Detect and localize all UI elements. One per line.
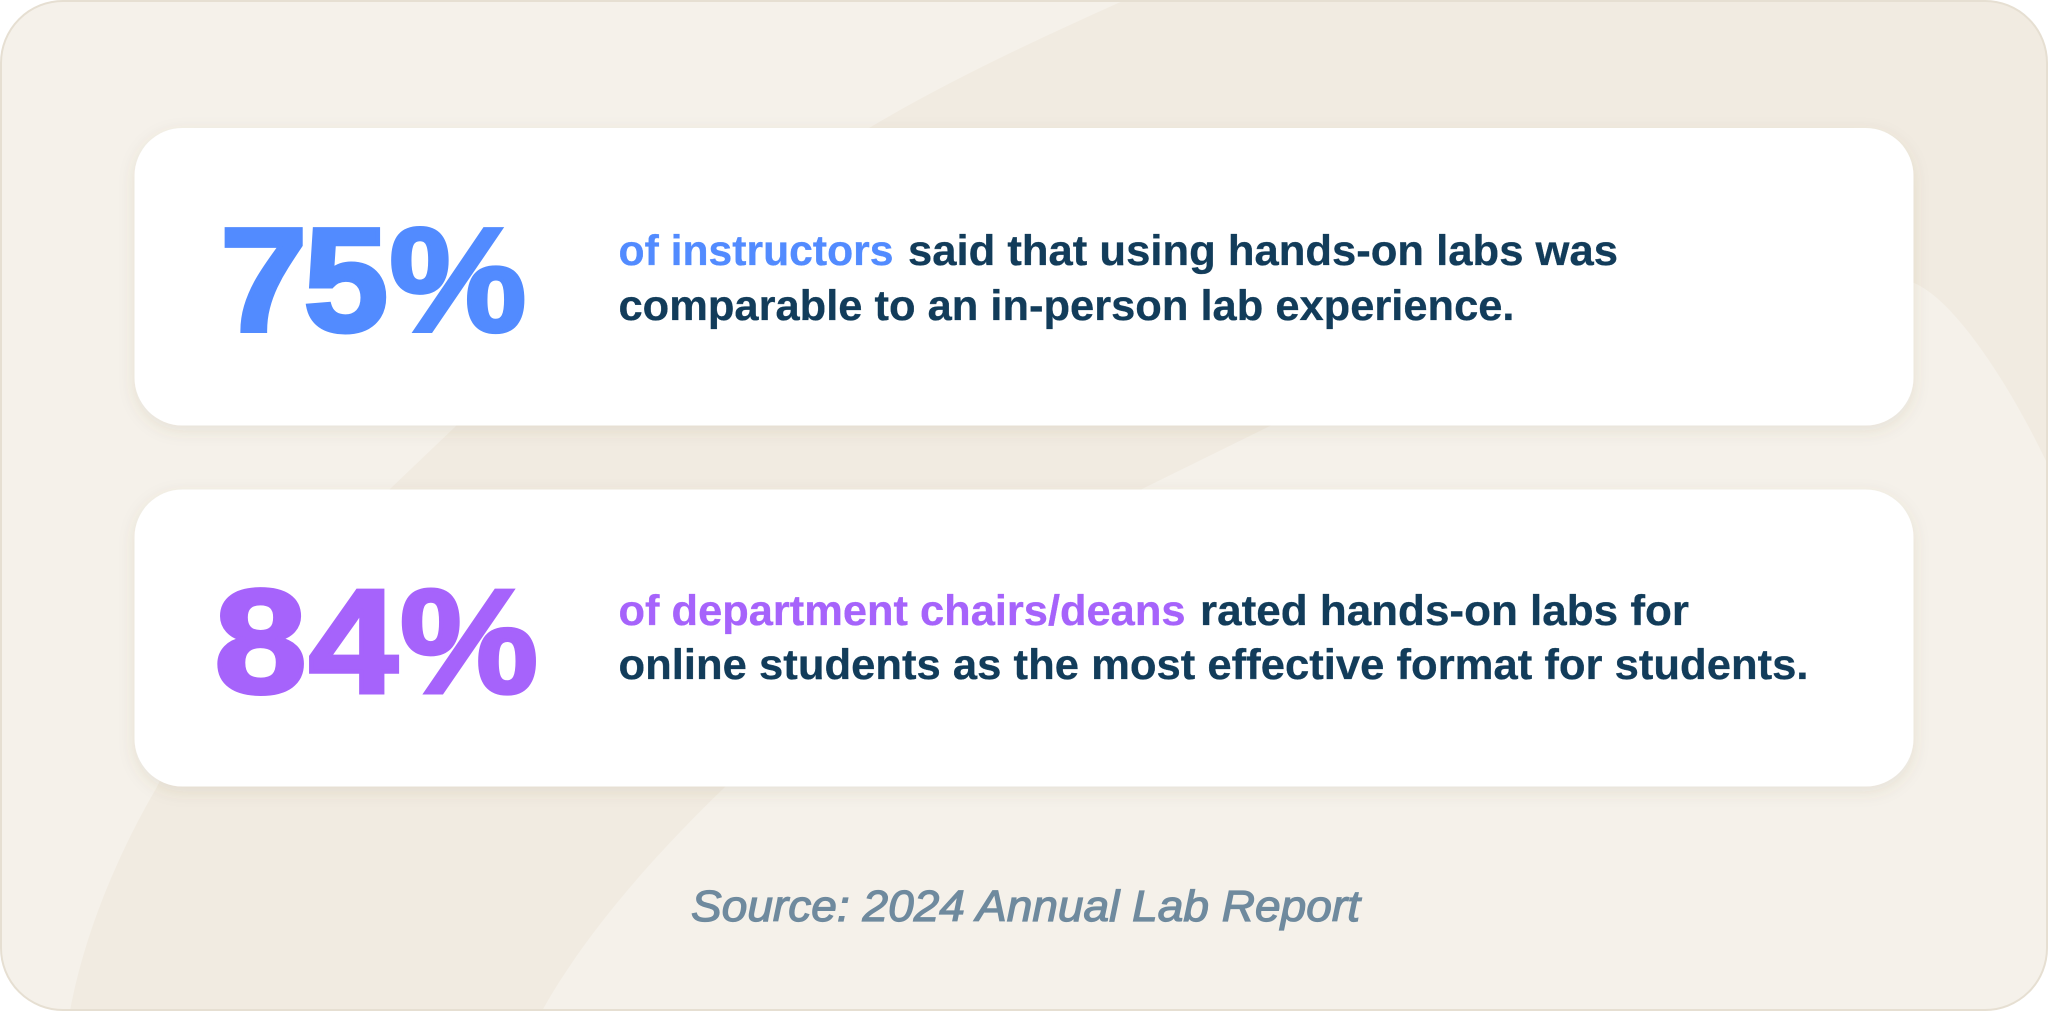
statement text: department chairs	[618, 587, 1808, 689]
statement text: department chairs: online students as the most effective format for students.	[618, 641, 1808, 689]
statement text: department chairs: rated hands-on labs for	[1200, 587, 1689, 635]
statement text: instructors	[618, 227, 1618, 330]
source note: Source: 2024 Annual Lab Report	[691, 882, 1362, 931]
card background	[134, 128, 1914, 426]
card background	[134, 490, 1914, 786]
big number: 75%: 7	[220, 198, 308, 363]
panel: department chairs statistic	[134, 490, 1914, 786]
big number: 75%	[220, 198, 526, 363]
statement text: instructors: said that using hands-on labs was	[908, 227, 1618, 275]
panel: instructors statistic	[134, 128, 1914, 426]
big number: 75%: %	[389, 198, 526, 363]
big number: 84%: %	[400, 560, 538, 724]
big number: 84%: 8	[214, 560, 307, 724]
statement text: instructors: of instructors	[618, 227, 894, 275]
big number: 75%: 5	[303, 198, 388, 363]
big number: 84%	[214, 560, 538, 724]
big number: 84%: 4	[309, 560, 398, 724]
statement text: department chairs: of department chairs/deans	[618, 587, 1186, 635]
statement text: instructors: comparable to an in-person lab experience.	[618, 282, 1514, 330]
